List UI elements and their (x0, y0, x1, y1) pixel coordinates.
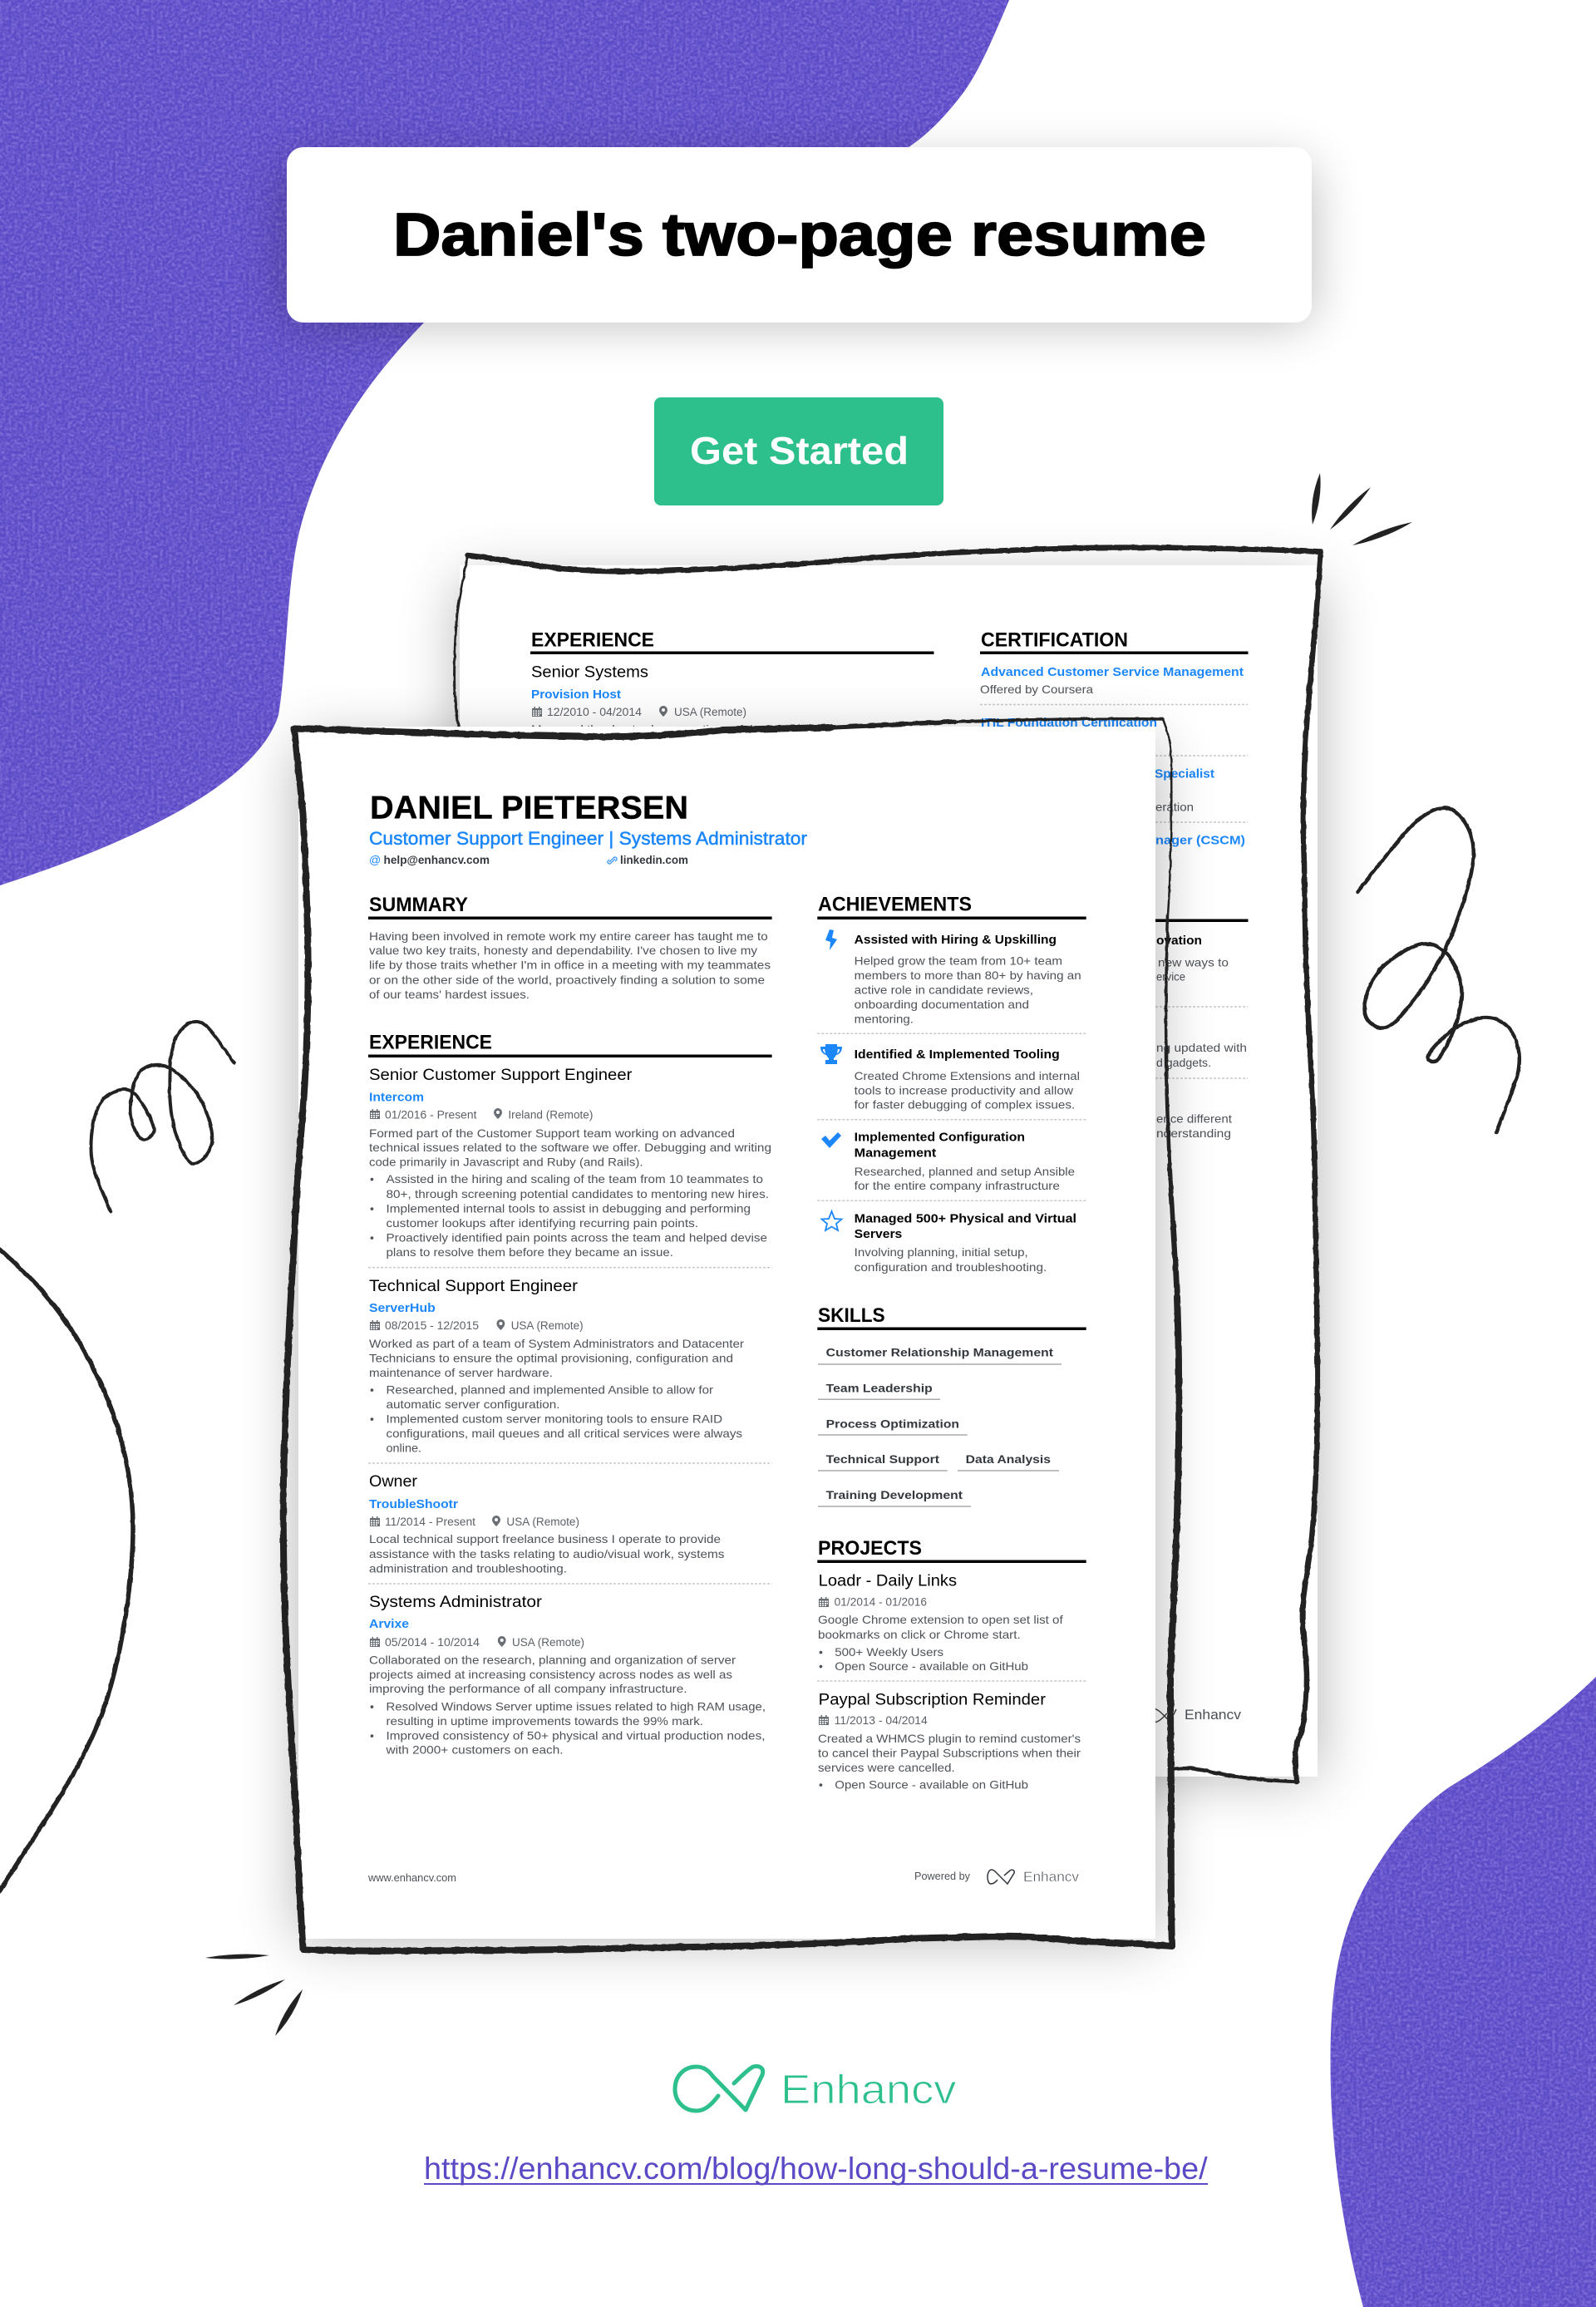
skills section: SKILLS (818, 1304, 885, 1327)
summary section: value two key traits, honesty and dependability. I've chosen to live my (369, 944, 757, 957)
skills section: Training Development (826, 1489, 963, 1501)
project: Paypal Subscription Reminder: Open Source - available on GitHub (835, 1777, 1028, 1791)
skills section: Technical Support (826, 1453, 940, 1466)
job: Technical Support Engineer: Technical Support Engineer (369, 1278, 579, 1295)
achievement: tooling: Identified & Implemented Tooling (855, 1048, 1060, 1062)
achievement: configuration management: Implemented Configuration (855, 1131, 1025, 1145)
contact details: @ (369, 853, 381, 866)
job: Senior Customer Support Engineer: Implemented internal tools to assist in debugging and performing (386, 1202, 751, 1215)
job: Systems Administrator: • (370, 1729, 374, 1743)
job: Systems Administrator: projects aimed at increasing consistency across nodes as well as (369, 1668, 732, 1681)
back page certification section: nager (CSCM) (1155, 834, 1245, 848)
project: Loadr: • (819, 1659, 823, 1673)
job: Technical Support Engineer: 08/2015 - 12/2015 (385, 1319, 479, 1332)
job: Systems Administrator: Systems Administrator (369, 1594, 543, 1611)
job: Senior Customer Support Engineer: • (370, 1230, 374, 1244)
back page passions section: ovation (1156, 934, 1202, 948)
achievement: physical and virtual servers: Managed 500+ Physical and Virtual (855, 1211, 1076, 1225)
panel: front resume page (283, 719, 1179, 1951)
back page certification section: Offered by Coursera (980, 683, 1093, 696)
achievement: hiring and upskilling: mentoring. (855, 1012, 914, 1025)
job: Owner: TroubleShootr (369, 1497, 458, 1511)
project: Loadr: Google Chrome extension to open set list of (818, 1613, 1063, 1626)
project: Loadr: • (819, 1645, 823, 1659)
job: Senior Customer Support Engineer: code primarily in Javascript and Ruby (and Rails). (369, 1156, 643, 1169)
project: Paypal Subscription Reminder: services were cancelled. (818, 1761, 955, 1774)
job: Senior Customer Support Engineer (369, 1067, 771, 1259)
resume header (369, 790, 807, 866)
back page footer logo: Enhancv (1185, 1707, 1241, 1723)
back page experience section: Provision Host (531, 688, 621, 702)
job: Senior Customer Support Engineer: Formed part of the Customer Support team working on advanced (369, 1126, 735, 1140)
job: Senior Customer Support Engineer: Senior Customer Support Engineer (369, 1067, 633, 1084)
back page experience section (530, 629, 934, 736)
job: Systems Administrator: Arvixe (369, 1617, 409, 1631)
achievement: tooling: tools to increase productivity and allow (855, 1083, 1074, 1097)
skills section (817, 1304, 1086, 1506)
back page passions section: nderstanding (1156, 1126, 1231, 1140)
job: Senior Customer Support Engineer: • (370, 1172, 374, 1186)
achievements section (817, 894, 1086, 1274)
back page certification section: CERTIFICATION (981, 629, 1128, 652)
job: Senior Customer Support Engineer: plans to resolve them before they became an issue. (386, 1245, 673, 1259)
back page footer logo (1152, 1707, 1241, 1723)
summary section: life by those traits whether I'm in office in a meeting with my teammates (369, 959, 771, 972)
background blob: top left (0, 0, 1009, 885)
project: Loadr: 01/2014 - 01/2016 (835, 1596, 927, 1609)
back page experience section: 12/2010 - 04/2014 (547, 706, 642, 718)
project: Paypal Subscription Reminder (818, 1691, 1081, 1791)
job: Technical Support Engineer (369, 1278, 744, 1455)
panel: back resume page (455, 547, 1321, 1782)
achievements section: ACHIEVEMENTS (818, 894, 972, 916)
skills section: Data Analysis (966, 1453, 1051, 1466)
project: Paypal Subscription Reminder: to cancel their Paypal Subscriptions when their (818, 1747, 1081, 1760)
job: Technical Support Engineer: automatic server configuration. (386, 1398, 560, 1411)
job: Systems Administrator: Collaborated on the research, planning and organization of server (369, 1653, 736, 1666)
job: Technical Support Engineer: online. (386, 1442, 421, 1455)
job: Technical Support Engineer: Implemented custom server monitoring tools to ensure RAID (386, 1412, 722, 1426)
project: Paypal Subscription Reminder: Paypal Subscription Reminder (819, 1691, 1047, 1709)
job: Technical Support Engineer: Researched, planned and implemented Ansible to allow for (386, 1383, 713, 1396)
candidate name: DANIEL PIETERSEN (370, 790, 688, 826)
resume footer: Enhancv (1023, 1869, 1079, 1885)
job: Systems Administrator: with 2000+ customers on each. (385, 1743, 564, 1756)
achievement: physical and virtual servers (821, 1211, 1076, 1274)
back page certification section: eration (1155, 800, 1194, 813)
get started button (654, 397, 943, 505)
back page certification section: Advanced Customer Service Management (981, 665, 1244, 679)
achievement: hiring and upskilling: members to more than 80+ by having an (855, 969, 1081, 982)
job: Technical Support Engineer: configurations, mail queues and all critical services were always (386, 1427, 742, 1440)
project: Loadr (818, 1573, 1063, 1673)
back page passions section: ng updated with (1156, 1041, 1247, 1054)
job: Technical Support Engineer: • (370, 1412, 374, 1426)
job: Technical Support Engineer: ServerHub (369, 1301, 436, 1315)
front page hand-drawn frame (283, 719, 1179, 1951)
back page certification section: Specialist (1155, 767, 1214, 781)
Enhancv logo (675, 2067, 957, 2112)
achievement: physical and virtual servers: Involving planning, initial setup, (855, 1245, 1028, 1259)
job: Senior Customer Support Engineer: Assisted in the hiring and scaling of the team from 10 teammates to (386, 1172, 763, 1186)
contact details: help@enhancv.com (384, 854, 490, 866)
get started button: Get Started (690, 429, 909, 472)
job: Senior Customer Support Engineer: Proactively identified pain points across the team and helped devise (386, 1230, 767, 1244)
achievement: hiring and upskilling: onboarding documentation and (855, 998, 1029, 1011)
job: Owner (369, 1473, 724, 1575)
job: Senior Customer Support Engineer: Ireland (Remote) (508, 1109, 593, 1121)
title card (287, 147, 1312, 323)
back page experience section: EXPERIENCE (531, 629, 654, 652)
back page passions section: ervice (1156, 969, 1185, 983)
project: Loadr: Open Source - available on GitHub (835, 1659, 1028, 1673)
job: Systems Administrator: USA (Remote) (512, 1636, 584, 1649)
job: Senior Customer Support Engineer: 01/2016 - Present (385, 1109, 477, 1121)
job: Systems Administrator (369, 1594, 766, 1756)
job: Owner: 11/2014 - Present (385, 1516, 475, 1528)
scribble: big arc left (0, 1248, 133, 1895)
back page passions section: new ways to (1158, 956, 1229, 969)
sparks: bottom left (205, 1955, 303, 2036)
job: Systems Administrator: Improved consistency of 50+ physical and virtual production nodes, (386, 1729, 765, 1743)
job: Technical Support Engineer: Worked as part of a team of System Administrators and Datacenter (369, 1337, 744, 1350)
achievement: physical and virtual servers: Servers (855, 1227, 902, 1241)
job: Systems Administrator: 05/2014 - 10/2014 (385, 1636, 480, 1649)
resume footer: Powered by (914, 1871, 971, 1882)
contact details (369, 853, 688, 866)
skills section: Process Optimization (826, 1418, 959, 1430)
achievement: tooling: for faster debugging of complex issues. (855, 1098, 1075, 1112)
scribble: loops right (1357, 808, 1520, 1132)
summary section: of our teams' hardest issues. (369, 988, 530, 1001)
back page experience section: Managed the day-to-day operations of the (531, 722, 764, 736)
resume footer (367, 1869, 1079, 1885)
projects section (817, 1537, 1086, 1791)
achievement: tooling: Created Chrome Extensions and internal (855, 1069, 1080, 1082)
summary section: Having been involved in remote work my entire career has taught me to (369, 929, 768, 943)
project: Loadr: Loadr - Daily Links (819, 1573, 957, 1590)
job: Owner: Owner (369, 1473, 418, 1491)
project: Loadr: bookmarks on click or Chrome start. (818, 1628, 1021, 1641)
summary section: or on the other side of the world, proactively finding a solution to some (369, 973, 765, 986)
achievement: configuration management: for the entire company infrastructure (855, 1179, 1060, 1192)
back page passions section: d gadgets. (1156, 1056, 1211, 1069)
projects section: PROJECTS (818, 1537, 922, 1560)
job: Owner: Local technical support freelance business I operate to provide (369, 1532, 721, 1545)
back page certification section (980, 629, 1249, 848)
back page experience section: USA (Remote) (674, 706, 746, 718)
scribble: loops left (91, 1021, 234, 1211)
project: Loadr: 500+ Weekly Users (835, 1645, 943, 1659)
achievement: configuration management: Management (855, 1146, 936, 1160)
job: Technical Support Engineer: • (370, 1383, 374, 1396)
skills section: Customer Relationship Management (826, 1347, 1054, 1358)
achievement: configuration management (821, 1131, 1075, 1192)
back page certification section: ITIL Foundation Certification (981, 716, 1157, 730)
summary section: SUMMARY (369, 894, 468, 916)
experience section: EXPERIENCE (369, 1031, 492, 1054)
back page hand-drawn frame (455, 547, 1321, 1782)
achievement: physical and virtual servers: configuration and troubleshooting. (855, 1260, 1047, 1274)
contact details: linkedin.com (620, 854, 688, 866)
summary section (368, 894, 772, 1001)
job: Senior Customer Support Engineer: customer lookups after identifying recurring pain points. (386, 1216, 698, 1230)
job: Senior Customer Support Engineer: 80+, through screening potential candidates to mentoring new hires. (386, 1187, 769, 1200)
job: Systems Administrator: improving the performance of all company infrastructure. (369, 1682, 687, 1695)
job: Technical Support Engineer: USA (Remote) (511, 1319, 584, 1332)
back page experience section: Senior Systems (531, 663, 648, 682)
achievement: hiring and upskilling: Helped grow the team from 10+ team (855, 954, 1062, 968)
job: Senior Customer Support Engineer: • (370, 1202, 374, 1215)
back page passions section (1155, 919, 1249, 1140)
job titles: Customer Support Engineer | Systems Administrator (369, 828, 807, 849)
skills section: Team Leadership (826, 1382, 933, 1395)
back page passions section: ence different (1156, 1112, 1232, 1126)
achievement: hiring and upskilling: active role in candidate reviews, (855, 983, 1033, 997)
resume footer: www.enhancv.com (367, 1872, 456, 1884)
job: Systems Administrator: • (370, 1700, 374, 1713)
job: Owner: USA (Remote) (506, 1516, 579, 1528)
project: Paypal Subscription Reminder: 11/2013 - 04/2014 (835, 1714, 928, 1727)
sparks: top right (1312, 473, 1412, 545)
achievement: hiring and upskilling (825, 929, 1081, 1025)
title text: Daniel's two-page resume (393, 202, 1206, 269)
project: Paypal Subscription Reminder: • (819, 1777, 823, 1791)
job: Senior Customer Support Engineer: technical issues related to the software we offer. Debugging and writing (369, 1141, 771, 1154)
achievement: configuration management: Researched, planned and setup Ansible (855, 1165, 1075, 1178)
Enhancv logo: Enhancv (781, 2068, 957, 2112)
experience section (368, 1031, 772, 1756)
background blob: bottom right (1331, 1677, 1596, 2307)
achievement: tooling (820, 1044, 1080, 1112)
job: Senior Customer Support Engineer: Intercom (369, 1091, 424, 1105)
job: Owner: administration and troubleshooting. (369, 1562, 567, 1575)
project: Paypal Subscription Reminder: Created a WHMCS plugin to remind customer's (818, 1732, 1081, 1745)
article link: https://enhancv.com/blog/how-long-should-a-resume-be/ (424, 2152, 1208, 2186)
achievement: hiring and upskilling: Assisted with Hiring & Upskilling (855, 933, 1057, 947)
job: Technical Support Engineer: maintenance of server hardware. (369, 1366, 553, 1379)
job: Owner: assistance with the tasks relating to audio/visual work, systems (369, 1547, 724, 1560)
job: Technical Support Engineer: Technicians to ensure the optimal provisioning, configuration and (369, 1352, 733, 1365)
job: Systems Administrator: resulting in uptime improvements towards the 99% mark. (386, 1714, 703, 1728)
job: Systems Administrator: Resolved Windows Server uptime issues related to high RAM usage, (386, 1700, 766, 1713)
